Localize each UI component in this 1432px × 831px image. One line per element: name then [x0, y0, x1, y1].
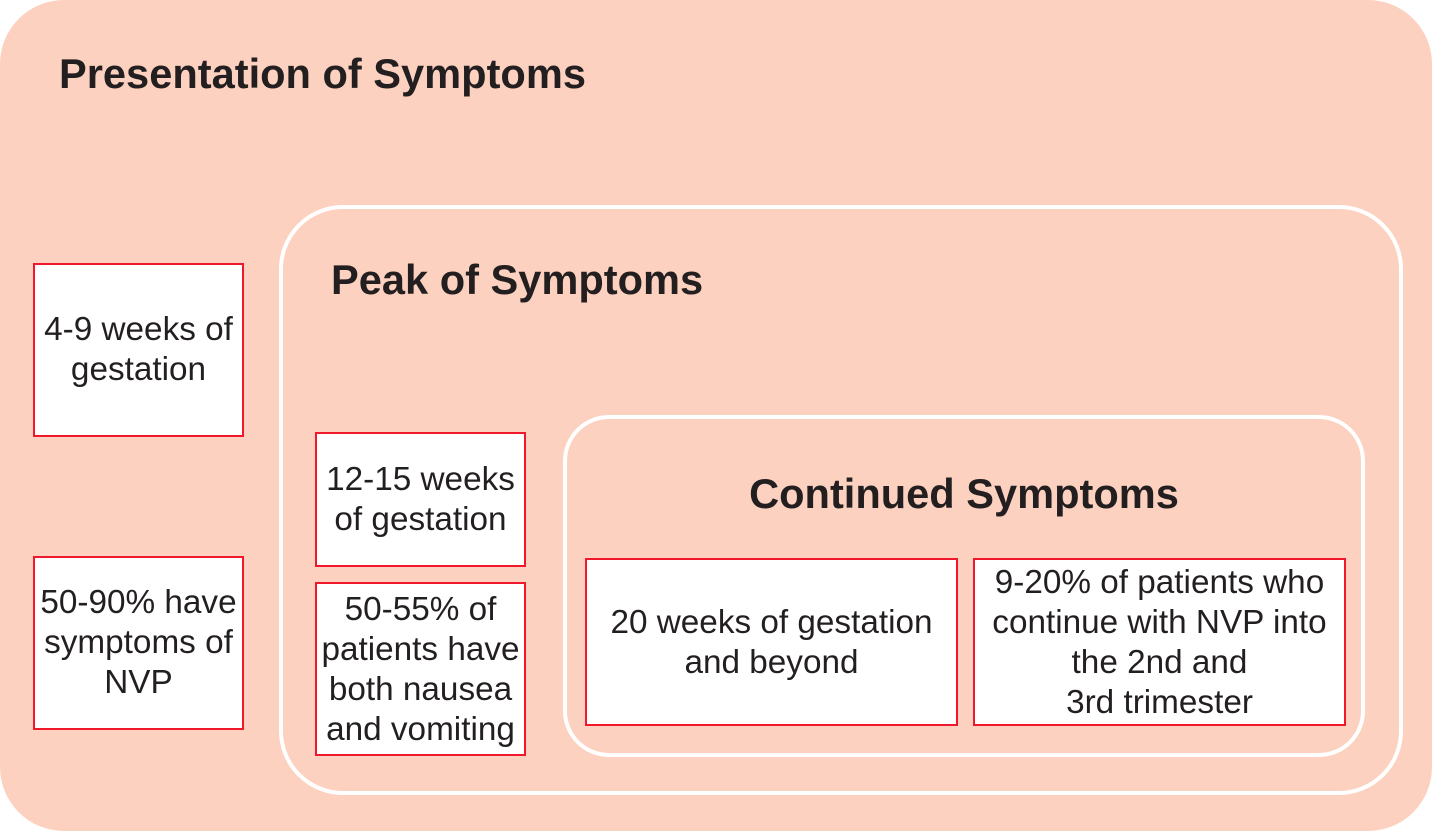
text box: 50-55% of patients: patients have [321, 631, 520, 668]
text box: 4-9 weeks of gestation: 4-9 weeks of [44, 311, 233, 348]
text box: 50-90% have symptoms: symptoms of [44, 624, 233, 661]
text box: 50-55% of patients: and vomiting [326, 711, 515, 748]
text box: 12-15 weeks of gestation: of gestation [334, 500, 507, 538]
text box: 12-15 weeks of gestation [315, 432, 526, 567]
text box: 50-90% have symptoms: NVP [104, 664, 173, 701]
text box: 12-15 weeks of gestation: 12-15 weeks [326, 460, 515, 498]
text box: 9-20% of patients: 3rd trimester [1066, 684, 1253, 721]
text box: 50-90% have symptoms: 50-90% have [40, 584, 237, 621]
text box: 50-55% of patients [315, 582, 526, 756]
text box: 20 weeks of gestation: and beyond [684, 644, 859, 681]
panel: continued symptoms [563, 415, 1365, 757]
heading: continued symptoms: Continued Symptoms [749, 470, 1179, 517]
text box: 9-20% of patients [973, 558, 1346, 726]
panel: peak of symptoms [279, 205, 1403, 795]
text box: 50-55% of patients: 50-55% of [345, 591, 496, 628]
text box: 20 weeks of gestation [585, 558, 958, 726]
text box: 9-20% of patients: the 2nd and [1072, 644, 1247, 681]
text box: 50-90% have symptoms [33, 556, 244, 730]
text box: 20 weeks of gestation: 20 weeks of gestation [610, 604, 933, 641]
text box: 50-55% of patients: both nausea [329, 671, 512, 708]
text box: 4-9 weeks of gestation [33, 263, 244, 437]
text box: 9-20% of patients: 9-20% of patients who [995, 564, 1324, 601]
text box: 4-9 weeks of gestation: gestation [71, 351, 206, 388]
text box: 9-20% of patients: continue with NVP into [992, 604, 1327, 641]
heading: presentation of symptoms: Presentation of Symptoms [59, 50, 586, 97]
heading: peak of symptoms: Peak of Symptoms [331, 256, 703, 303]
